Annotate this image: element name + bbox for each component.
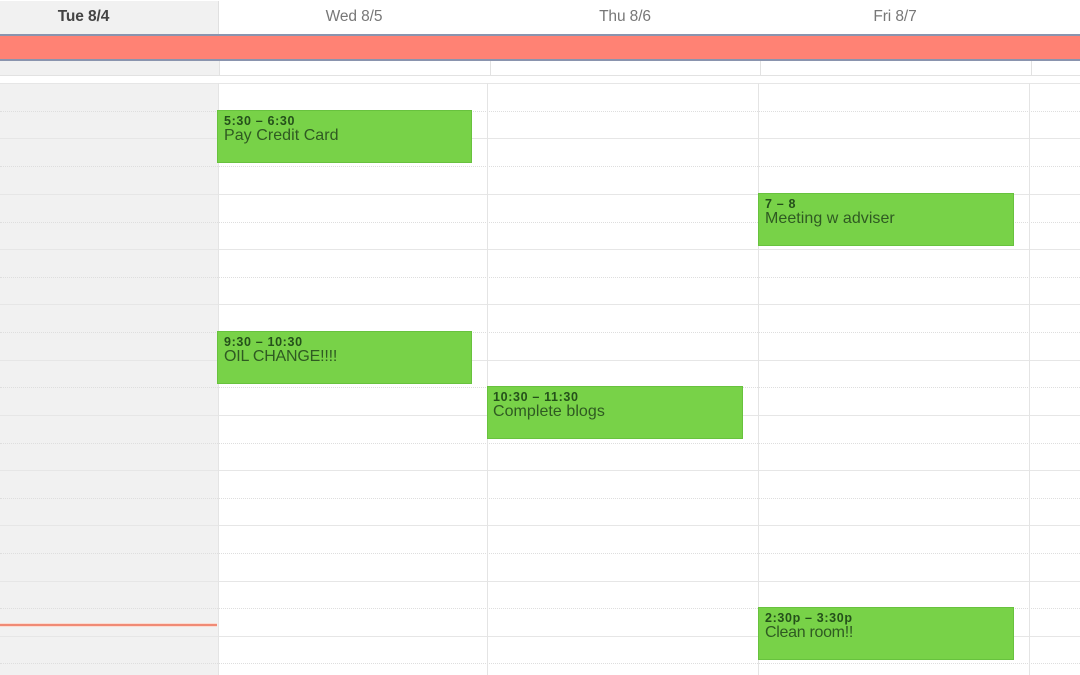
event: Clean room bbox=[758, 607, 1014, 660]
all-day red event band bbox=[0, 34, 1080, 61]
event: Clean room: Clean room!! bbox=[765, 624, 853, 641]
event: Meeting w adviser bbox=[758, 193, 1014, 246]
heading: Wed 8/5: Wed 8/5 bbox=[326, 8, 382, 25]
heading: Fri 8/7: Fri 8/7 bbox=[873, 8, 917, 25]
all-day row bbox=[0, 60, 1080, 76]
event: OIL CHANGE: 9:30 – 10:30 bbox=[224, 335, 303, 349]
heading: Thu 8/6: Thu 8/6 bbox=[599, 8, 651, 25]
event: OIL CHANGE: OIL CHANGE!!!! bbox=[224, 348, 337, 365]
header row bbox=[0, 1, 917, 34]
event: Pay Credit Card bbox=[217, 110, 472, 163]
today header cell bbox=[0, 1, 219, 34]
today column shading bbox=[0, 83, 218, 675]
event: Pay Credit Card: 5:30 – 6:30 bbox=[224, 114, 295, 128]
current time indicator bbox=[0, 623, 217, 627]
event: Complete blogs: 10:30 – 11:30 bbox=[493, 390, 579, 404]
event: Meeting w adviser: Meeting w adviser bbox=[765, 210, 895, 227]
event: Clean room: 2:30p – 3:30p bbox=[765, 611, 853, 625]
event: OIL CHANGE bbox=[217, 331, 472, 384]
event: Meeting w adviser: 7 – 8 bbox=[765, 197, 796, 211]
event: Pay Credit Card: Pay Credit Card bbox=[224, 127, 339, 144]
event: Complete blogs bbox=[487, 386, 743, 439]
heading: Tue 8/4: Tue 8/4 bbox=[58, 8, 109, 25]
event: Complete blogs: Complete blogs bbox=[493, 403, 605, 420]
